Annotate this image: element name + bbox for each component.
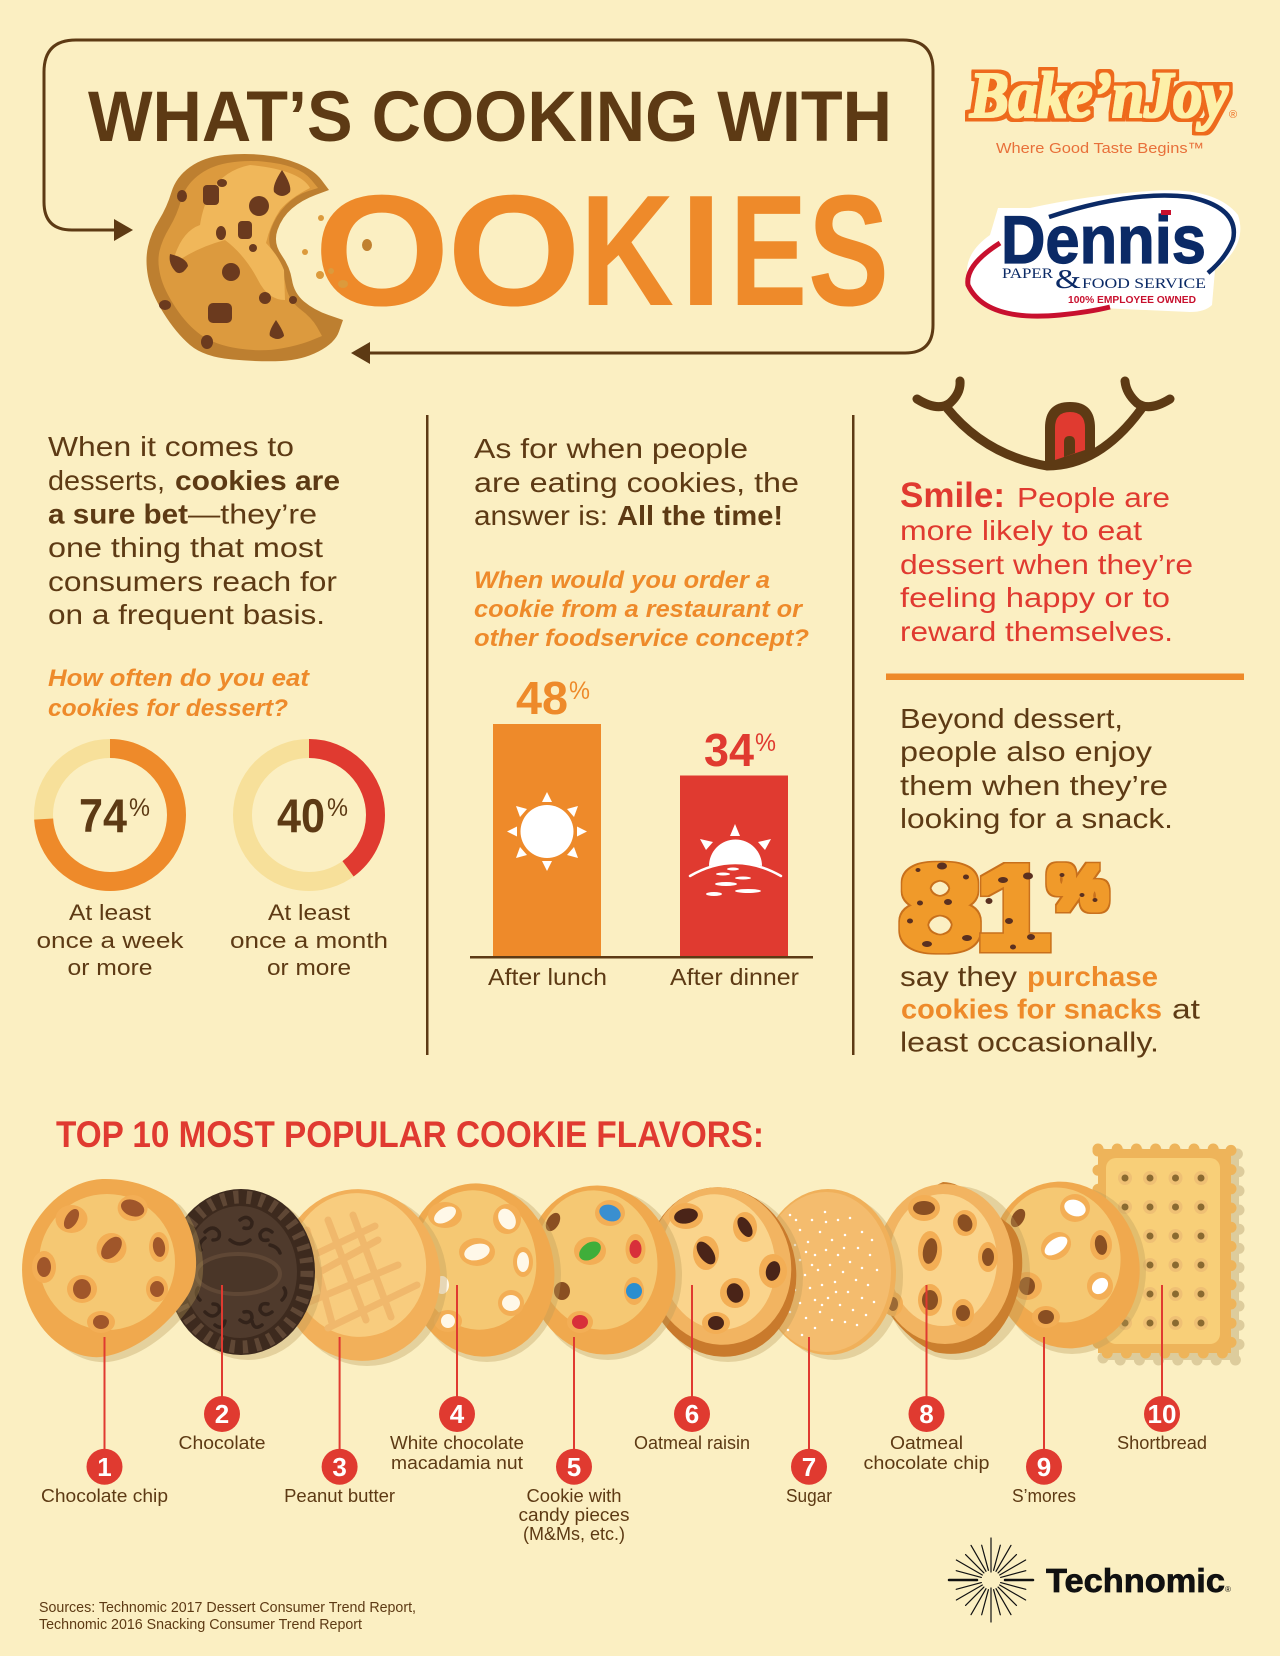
text block: when people eat cookies: are eating cookies, the [474, 467, 799, 498]
title: ookies word: S [808, 163, 889, 339]
text block: smile: reward themselves. [900, 616, 1173, 647]
donut chart: 40 percent: 40 [277, 789, 325, 842]
cookie 3: peanut butter [266, 1176, 454, 1374]
caption: once a month: At least [268, 900, 350, 925]
logo: Technomic [949, 1538, 1231, 1622]
cookie numeral: 81 percent: 8 [898, 841, 982, 975]
callout 2: chocolate [178, 1285, 266, 1453]
cookie 6: oatmeal raisin [632, 1175, 810, 1369]
text block: purchase cookies for snacks [900, 961, 1200, 1058]
callout 6: oatmeal raisin: Oatmeal raisin [634, 1433, 750, 1453]
callout 7: sugar: Sugar [786, 1486, 832, 1506]
bar: after lunch 48 percent [493, 724, 601, 956]
question: how often: How often do you eat [48, 665, 310, 692]
title: what's cooking with: WHAT’S COOKING WITH [88, 78, 892, 157]
callout 7: sugar [786, 1337, 832, 1506]
question: how often [48, 665, 310, 722]
callout 1: chocolate chip: 1 [97, 1452, 112, 1482]
logo: Dennis Paper & Food Service: Dennis [1001, 202, 1206, 278]
text block: beyond dessert [900, 703, 1173, 834]
title: ookies word [314, 163, 889, 339]
callout 4: white chocolate macadamia nut [390, 1285, 524, 1473]
text block: smile [900, 476, 1193, 647]
crumbs [302, 215, 372, 288]
text block: beyond dessert: people also enjoy [900, 736, 1152, 767]
callout 5: cookie with candy pieces: candy pieces [518, 1505, 630, 1525]
text block: desserts intro [48, 431, 340, 630]
text block: desserts intro: When it comes to [48, 431, 294, 462]
title frame with arrows [44, 40, 933, 364]
callout 1: chocolate chip [41, 1337, 168, 1506]
cookie numeral: 81 percent [898, 841, 1108, 975]
donut chart: 40 percent: % [327, 794, 348, 822]
icon: smile with tongue [917, 381, 1170, 466]
text block: desserts intro: one thing that most [48, 532, 323, 563]
callout 2: chocolate: 2 [215, 1399, 229, 1429]
title: ookies word: E [730, 163, 807, 339]
logo: Technomic: Technomic [1046, 1562, 1225, 1599]
illustration: bitten cookie as the letter C [146, 154, 343, 361]
column dividers [426, 415, 854, 1055]
cookie row [22, 1149, 1239, 1374]
donut chart: 74 percent: 74 [79, 789, 127, 842]
cookie 5: candy pieces [511, 1171, 691, 1369]
callout 10: shortbread: Shortbread [1117, 1433, 1207, 1453]
text block: smile: more likely to eat [900, 515, 1142, 546]
callout 9: s'mores [1012, 1337, 1076, 1506]
title: ookies word: O [447, 163, 581, 339]
title: ookies word: K [580, 163, 674, 339]
text block: smile: dessert when they’re [900, 549, 1193, 580]
text block: desserts intro: —they’re [188, 498, 317, 530]
text block: smile: Smile: [900, 476, 1005, 515]
question: when would you order: When would you order a [474, 567, 770, 594]
sources: Sources: Technomic 2017 Dessert Consumer Trend Report, [39, 1600, 416, 1616]
callout 2: chocolate: Chocolate [178, 1433, 266, 1453]
text block: purchase cookies for snacks: at [1172, 994, 1200, 1024]
callout 10: shortbread: 10 [1148, 1399, 1176, 1429]
logo: Dennis Paper & Food Service: PAPER [1002, 266, 1053, 282]
cookie 7: sugar [760, 1189, 903, 1360]
callout 5: cookie with candy pieces: Cookie with [526, 1486, 622, 1506]
callout 5: cookie with candy pieces: 5 [567, 1452, 581, 1482]
callout 4: white chocolate macadamia nut: 4 [450, 1399, 465, 1429]
text block: purchase cookies for snacks: least occasionally. [900, 1026, 1159, 1058]
text block: beyond dessert: them when they’re [900, 770, 1168, 801]
question: when would you order: other foodservice concept? [474, 625, 809, 652]
callout 3: peanut butter [284, 1337, 395, 1506]
title: ookies word: I [680, 163, 722, 339]
callout 6: oatmeal raisin [634, 1285, 750, 1453]
sources: Technomic 2016 Snacking Consumer Trend Report [39, 1617, 362, 1633]
logo: Bake'n Joy: ® [1229, 109, 1237, 121]
cookie 8: oatmeal chocolate chip [875, 1182, 1030, 1360]
donut chart: 40 percent [242, 748, 376, 882]
callout 8: oatmeal chocolate chip: 8 [919, 1399, 934, 1429]
text block: desserts intro: on a frequent basis. [48, 599, 325, 630]
bar: after dinner 34 percent [680, 776, 788, 956]
text block: smile: People are [1017, 482, 1170, 513]
text block: desserts intro: cookies are [175, 465, 340, 496]
logo: Bake'n Joy: Bake’nJoy [969, 59, 1229, 132]
text block: desserts intro: consumers reach for [48, 566, 337, 597]
value: 48 percent [516, 672, 590, 724]
text block: smile: feeling happy or to [900, 582, 1170, 613]
logo: Technomic: ® [1225, 1585, 1231, 1594]
logo: Dennis Paper & Food Service: & [1055, 264, 1081, 294]
logo: Bake'n Joy [969, 59, 1237, 157]
callout 5: cookie with candy pieces [518, 1337, 630, 1544]
caption: once a week: At least [69, 900, 151, 925]
axis label: after dinner: After dinner [670, 964, 799, 990]
value: 48 percent: % [569, 677, 590, 705]
logo: Dennis Paper & Food Service: 100% EMPLOYEE OWNED [1068, 295, 1196, 306]
value: 34 percent: % [755, 729, 776, 757]
callout 3: peanut butter: 3 [332, 1452, 347, 1482]
callout 8: oatmeal chocolate chip [864, 1285, 990, 1473]
text block: desserts intro: desserts, [48, 465, 165, 496]
callout 8: oatmeal chocolate chip: chocolate chip [864, 1453, 990, 1473]
bar chart: after lunch and after dinner [470, 672, 813, 990]
caption: once a month: or more [267, 955, 351, 980]
cookie 9: s'mores [972, 1165, 1158, 1365]
axis label: after lunch: After lunch [488, 964, 607, 990]
caption: once a month [230, 900, 388, 980]
text block: when people eat cookies: As for when people [474, 433, 748, 464]
logo: Dennis Paper & Food Service: FOOD SERVICE [1082, 276, 1206, 292]
heading: top 10 flavors: TOP 10 MOST POPULAR COOKIE FLAVORS: [56, 1114, 764, 1155]
callout 4: white chocolate macadamia nut: White chocolate [390, 1433, 524, 1453]
callout 9: s'mores: S’mores [1012, 1486, 1076, 1506]
cookie numeral: 81 percent: 1 [975, 841, 1051, 975]
question: how often: cookies for dessert? [48, 695, 288, 722]
cookie 2: chocolate sandwich [167, 1189, 322, 1360]
callout 10: shortbread [1117, 1285, 1207, 1453]
cookie numeral: 81 percent: % [1048, 854, 1108, 923]
question: when would you order [474, 567, 809, 652]
caption: once a week: or more [68, 955, 152, 980]
text block: when people eat cookies: All the time! [617, 500, 783, 531]
icon: sun [507, 792, 587, 871]
caption: once a month: once a month [230, 928, 388, 953]
donut chart: 74 percent [44, 748, 176, 882]
caption: once a week [36, 900, 185, 980]
callout 3: peanut butter: Peanut butter [284, 1486, 395, 1506]
cookie 10: shortbread [1098, 1149, 1239, 1360]
question: when would you order: cookie from a restaurant or [474, 596, 804, 623]
text block: purchase cookies for snacks: purchase [1027, 961, 1158, 992]
sources [39, 1600, 416, 1633]
text block: when people eat cookies: answer is: [474, 500, 608, 531]
logo: Bake'n Joy: Where Good Taste Begins™ [996, 140, 1204, 157]
text block: beyond dessert: looking for a snack. [900, 803, 1173, 834]
title: ookies word: O [314, 163, 450, 339]
icon: sunset [690, 824, 781, 896]
callout 8: oatmeal chocolate chip: Oatmeal [890, 1433, 963, 1453]
callout 1: chocolate chip: Chocolate chip [41, 1486, 168, 1506]
callout 9: s'mores: 9 [1037, 1452, 1051, 1482]
callout 4: white chocolate macadamia nut: macadamia nut [391, 1453, 523, 1473]
text block: desserts intro: a sure bet [48, 498, 188, 530]
cookie 1: chocolate chip [22, 1179, 203, 1362]
text block: purchase cookies for snacks: cookies for snacks [901, 994, 1162, 1024]
logo: Dennis Paper & Food Service [967, 190, 1240, 317]
caption: once a week: once a week [36, 928, 185, 953]
callout 6: oatmeal raisin: 6 [685, 1399, 699, 1429]
value: 34 percent: 34 [704, 724, 754, 776]
text block: purchase cookies for snacks: say they [900, 961, 1017, 992]
value: 48 percent: 48 [516, 672, 568, 724]
text block: beyond dessert: Beyond dessert, [900, 703, 1123, 734]
donut chart: 74 percent: % [129, 794, 150, 822]
cookie 4: white chocolate macadamia nut [392, 1171, 568, 1369]
text block: when people eat cookies [474, 433, 799, 531]
callout 5: cookie with candy pieces: (M&Ms, etc.) [523, 1524, 625, 1544]
callout 7: sugar: 7 [802, 1452, 816, 1482]
